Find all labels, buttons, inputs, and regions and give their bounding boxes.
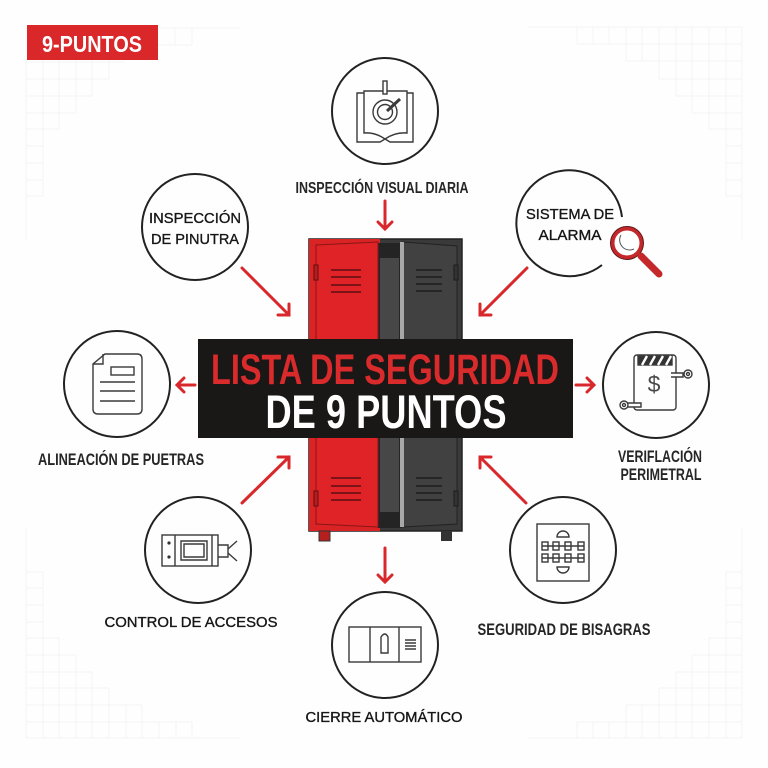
- label: VERIFLACIÓN: [618, 447, 702, 466]
- label: CONTROL DE ACCESOS: [104, 614, 278, 631]
- item: control de accesos: [104, 497, 278, 631]
- arrow: upper left: [242, 268, 289, 315]
- label: INSPECCIÓN VISUAL DIARIA: [296, 178, 469, 197]
- item: sistema de alarma: ALARMA: [538, 227, 602, 244]
- icon: document: [93, 354, 142, 414]
- arrow: left: [177, 378, 195, 392]
- title line 1: LISTA DE SEGURIDAD: [211, 346, 559, 394]
- item: inspección de pintura: [142, 174, 248, 280]
- central locker illustration: [309, 239, 462, 541]
- icon: cabinet panel: [349, 627, 421, 662]
- item: inspección visual diaria: [296, 58, 469, 197]
- item: verificación perimetral: $: [648, 371, 661, 397]
- icon: dollar panel: [620, 355, 692, 410]
- icon: access device: [162, 535, 237, 566]
- arrow: lower left: [242, 457, 289, 503]
- label: ALINEACIÓN DE PUETRAS: [38, 450, 204, 469]
- item: sistema de alarma: [516, 170, 659, 276]
- item: seguridad de bisagras: [478, 497, 650, 639]
- icon: magnifying glass: [610, 226, 659, 274]
- label: SEGURIDAD DE BISAGRAS: [478, 620, 650, 639]
- title line 2: DE 9 PUNTOS: [266, 385, 506, 438]
- icon: hinge panel: [537, 524, 589, 581]
- item: inspección de pintura: DE PINUTRA: [151, 231, 239, 248]
- title banner: [198, 339, 573, 438]
- item: verificación perimetral: [603, 332, 709, 484]
- arrow: right: [576, 378, 594, 392]
- badge: 9-PUNTOS: 9-PUNTOS: [42, 31, 142, 57]
- arrow: top: [378, 201, 392, 229]
- label: CIERRE AUTOMÁTICO: [306, 709, 462, 726]
- icon: target book: [357, 81, 413, 142]
- badge: 9-PUNTOS: [27, 25, 158, 60]
- item: verificación perimetral: PERIMETRAL: [620, 465, 702, 484]
- arrow: bottom: [378, 548, 392, 582]
- item: alineación de puertas: [38, 331, 204, 469]
- item: cierre automático: [306, 592, 462, 726]
- arrow: upper right: [480, 268, 527, 315]
- arrow: lower right: [480, 457, 526, 503]
- item: inspección de pintura: INSPECCIÓN: [149, 210, 241, 227]
- item: sistema de alarma: SISTEMA DE: [526, 206, 614, 223]
